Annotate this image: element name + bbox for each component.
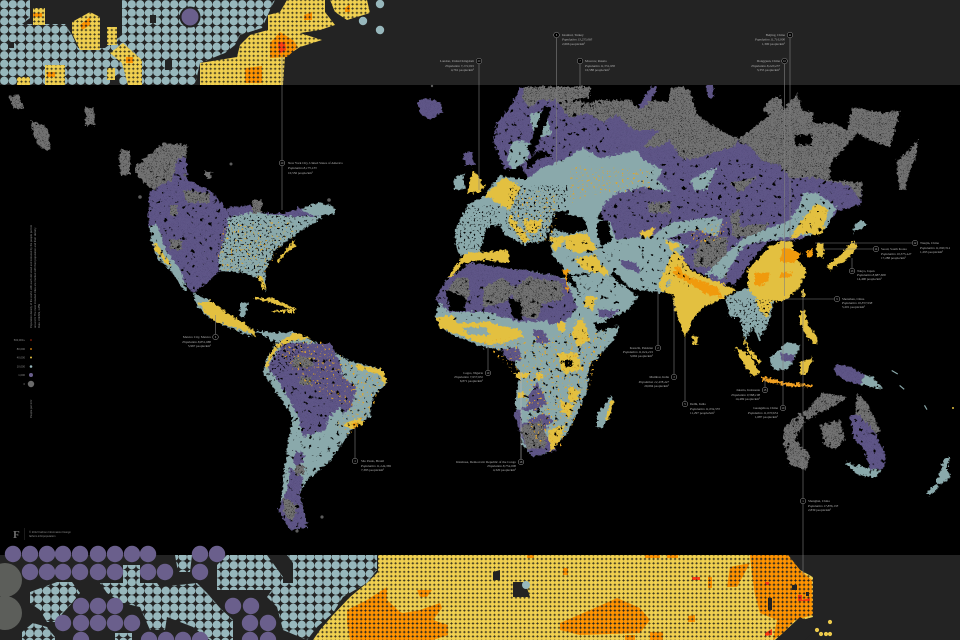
- region: Africa: [435, 250, 638, 457]
- callout: Shanghai: Shanghai, China: [808, 499, 830, 504]
- callout: Tokyo: Population 8,887,608: [856, 273, 886, 278]
- callout: Shanghai: 1: [802, 500, 804, 503]
- region: South America: [253, 330, 387, 530]
- callout: Dongguan: [750, 58, 787, 296]
- callout: Kinshasa: 4,320 people/km²: [493, 468, 516, 473]
- callout: Seoul: 14: [875, 248, 878, 251]
- callout: Sao Paulo: Population 11,244,369: [360, 464, 391, 469]
- callout: Karachi: Karachi, Pakistan: [630, 346, 653, 351]
- callout: Istanbul: [554, 32, 593, 165]
- callout: Mexico City: 5,967 people/km²: [188, 344, 211, 349]
- callout: Guangzhou: [747, 300, 786, 420]
- callout: Delhi: Delhi, India: [690, 402, 706, 407]
- callout: Mumbai: Population 12,478,447: [638, 380, 669, 385]
- callout: Lagos: 6,871 people/km²: [460, 379, 483, 384]
- callout: Karachi: 3,662 people/km²: [630, 354, 653, 359]
- legend: density scale: 80,000: [17, 347, 25, 351]
- texture: black gaps across land: [148, 100, 890, 530]
- callout: New York City: New York City, United States of America: [288, 161, 343, 166]
- callout: Jakarta: Population 9,588,198: [730, 393, 760, 398]
- red cells: [692, 577, 810, 636]
- logo and credit: F: [13, 529, 20, 541]
- callout: Jakarta: 15: [764, 389, 767, 392]
- world map: [8, 85, 954, 533]
- dots: arctic outliers: [138, 85, 433, 533]
- callout: London: [440, 58, 482, 190]
- callout: Shenzhen: [785, 296, 873, 310]
- callout: Lagos: [453, 345, 491, 384]
- callout: Guangzhou: 1,687 people/km²: [755, 415, 778, 420]
- legend: density scale: 1,000: [18, 373, 25, 377]
- callout: London: London, United Kingdom: [440, 59, 474, 64]
- callout: Mumbai: Mumbai, India: [649, 375, 670, 380]
- region: Eurasia: [453, 85, 918, 388]
- callout: Sao Paulo: 4: [354, 460, 356, 463]
- callout: Dongguan: 3,355 people/km²: [757, 68, 780, 73]
- orange cells: [347, 555, 813, 640]
- text block: map description rotated: around it. The most crowded cities are marked with their population and their density.: [33, 227, 37, 328]
- callout: Shenzhen: Shenzhen, China: [842, 297, 865, 302]
- callout: Beijing: Population 11,716,000: [754, 38, 785, 42]
- callout: Shanghai: [800, 290, 839, 575]
- legend: density scale: 10,000: [17, 364, 25, 368]
- text block: map description rotated: Population density of the world, with each dot sized and coloured by the people per km: [29, 224, 33, 328]
- callout: Seoul: 17,288 people/km²: [881, 256, 906, 261]
- grey cells: [0, 563, 22, 630]
- callout: Dongguan: Dongguan, China: [757, 59, 781, 64]
- callout: Jakarta: 14,469 people/km²: [735, 397, 760, 402]
- text block: map description rotated: [29, 224, 41, 328]
- callout: Delhi: [682, 338, 720, 416]
- callout: Lagos: Population 7,937,932: [453, 375, 483, 380]
- callout: Tokyo: [849, 258, 886, 282]
- texture: fine gaps in settled areas: [216, 185, 775, 385]
- callout: Seoul: Seoul, South Korea: [881, 247, 907, 252]
- callout: Tokyo: 14,400 people/km²: [857, 277, 882, 282]
- callout: Shenzhen: Population 10,357,938: [841, 301, 873, 306]
- callout: Moscow: 10,588 people/km²: [585, 68, 610, 73]
- region: Iceland: [417, 98, 443, 120]
- callout: Delhi: 5: [684, 403, 686, 406]
- callout: Shenzhen: 5,201 people/km²: [842, 305, 865, 310]
- callout: Mumbai: 3: [673, 376, 675, 379]
- callout: Guangzhou: Population 11,070,654: [747, 411, 778, 416]
- callout: Karachi: 2: [657, 347, 659, 350]
- callout: New York City: 10: [281, 162, 284, 165]
- callout: Tianjin: Tianjin, China: [920, 241, 939, 246]
- region: Australia and New Zealand: [783, 393, 951, 496]
- callout: Beijing: Beijing, China: [766, 33, 786, 38]
- callout: Guangzhou: Guangzhou, China: [753, 406, 779, 411]
- callout: New York City: [279, 57, 343, 210]
- callout: Jakarta: [730, 379, 768, 402]
- callout: Kinshasa: Population 8,754,000: [486, 464, 516, 469]
- callout: Tokyo: Tokyo, Japan: [857, 269, 875, 274]
- callout: Karachi: Population 11,624,219: [622, 350, 653, 355]
- callout: Mumbai: 20,694 people/km²: [644, 384, 669, 389]
- callout: Guangzhou: 10: [782, 407, 785, 410]
- callout: Sao Paulo: [352, 428, 391, 473]
- panel: top zoom strip: [0, 0, 960, 85]
- callout: Shanghai: 2,839 people/km²: [808, 508, 831, 513]
- callout: Mumbai: [638, 300, 677, 389]
- callout: New York City: Population 8,175,133: [287, 166, 317, 171]
- text block: map description rotated: Data: CIESIN, GPW: [37, 303, 41, 328]
- legend: density scale: 500,000+: [14, 338, 25, 342]
- region: Pacific islands: [755, 329, 954, 410]
- callout: London: Population 7,172,091: [444, 64, 474, 69]
- callout: Delhi: 11,297 people/km²: [690, 411, 715, 416]
- callout: Beijing: 11: [789, 34, 792, 37]
- logo and credit: fathom.info/population: [29, 534, 56, 538]
- callout: Kinshasa: 18: [520, 461, 523, 464]
- callout: Lagos: Lagos, Nigeria: [463, 371, 484, 376]
- legend: density scale: 0: [24, 382, 26, 386]
- callout: Kinshasa: Kinshasa, Democratic Republic of the Congo: [456, 460, 516, 465]
- panel: bottom zoom strip: [0, 546, 960, 640]
- callout: Beijing: [754, 32, 793, 242]
- callout: Shenzhen: 9: [836, 298, 838, 301]
- callout: Beijing: 1,300 people/km²: [762, 42, 785, 47]
- callout: New York City: 10,556 people/km²: [288, 171, 313, 176]
- callout: Tianjin: 1,293 people/km²: [920, 250, 943, 255]
- region: North America: [8, 95, 335, 337]
- teal cells: [22, 555, 377, 640]
- callout: Moscow: Population 11,551,930: [584, 64, 615, 69]
- yellow cells: [313, 555, 813, 640]
- callout: Mexico City: Mexico City, Mexico: [183, 335, 211, 340]
- callout: London: 20: [478, 60, 481, 63]
- callout: Seoul: [822, 246, 912, 261]
- legend: density scale: People per km²: [29, 400, 33, 418]
- purple cells: [5, 546, 276, 640]
- callout: Tianjin: Population 11,090,314: [919, 246, 950, 251]
- callout: Lagos: 19: [487, 372, 490, 375]
- legend: density scale: [14, 338, 34, 418]
- callout: Tokyo: 13: [851, 270, 854, 273]
- speckles: towns: [218, 165, 730, 450]
- callout: Tianjin: [815, 240, 950, 255]
- callout: Sao Paulo: 7,383 people/km²: [361, 468, 384, 473]
- legend: density scale: 40,000: [17, 356, 25, 360]
- callout: London: 4,761 people/km²: [451, 68, 474, 73]
- callout: Mexico City: [181, 315, 218, 349]
- callout: Tianjin: 12: [914, 242, 917, 245]
- callout: Dongguan: 16: [783, 60, 786, 63]
- callout: Dongguan: Population 8,220,237: [750, 64, 780, 69]
- callout: Istanbul: 6: [556, 34, 558, 37]
- callout: Karachi: [622, 292, 661, 359]
- logo and credit: [13, 528, 71, 541]
- callout: Moscow: Moscow, Russia: [585, 59, 607, 64]
- callout: Istanbul: Population 13,255,685: [561, 38, 593, 42]
- callout: Sao Paulo: São Paulo, Brazil: [361, 459, 384, 464]
- gaps: [493, 570, 817, 640]
- callout: Moscow: 7: [579, 60, 581, 63]
- callout: Kinshasa: [456, 372, 524, 473]
- logo and credit: © 2012 Fathom Information Design: [29, 530, 71, 534]
- callout: Istanbul: 2,666 people/km²: [562, 42, 585, 47]
- callout: Mexico City: Population 8,851,080: [181, 340, 211, 345]
- callout: Seoul: Population 10,575,447: [880, 252, 912, 257]
- callout: Shanghai: Population 17,836,133: [807, 504, 839, 509]
- callout: Mexico City: 3: [215, 336, 217, 339]
- callout: Delhi: Population 11,034,555: [689, 407, 720, 412]
- callout: Jakarta: Jakarta, Indonesia: [736, 388, 761, 393]
- callout: Moscow: [577, 58, 615, 115]
- callout: Istanbul: Istanbul, Turkey: [562, 33, 584, 38]
